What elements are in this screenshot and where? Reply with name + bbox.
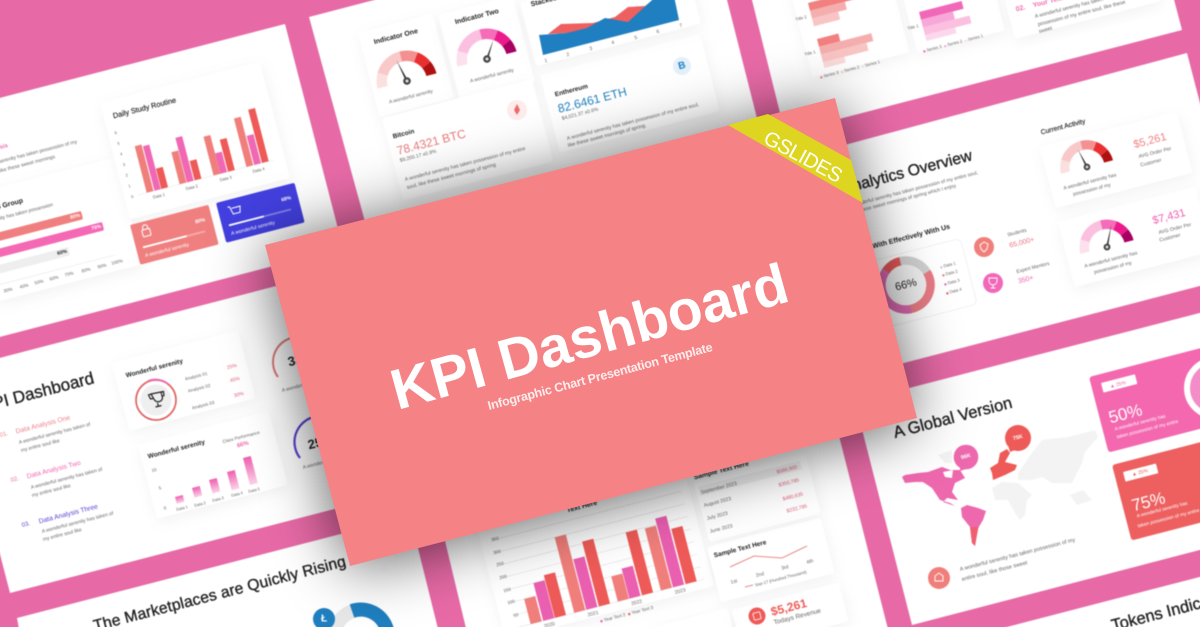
ethereum text: Enthereum bbox=[554, 83, 589, 98]
table: August 2023 bbox=[703, 496, 732, 509]
table: Sample Text Here bbox=[693, 460, 750, 481]
y axis labels: 100 bbox=[507, 599, 516, 605]
item 01 bbox=[0, 415, 92, 454]
card: list bbox=[1005, 0, 1160, 39]
stat: expert mentors: Expert Mentors bbox=[1016, 261, 1051, 275]
line chart: 1st bbox=[730, 578, 739, 586]
bitcoin text: 78.4321 BTC bbox=[395, 126, 468, 158]
item 02 bbox=[10, 460, 104, 499]
card: activity one bbox=[1040, 112, 1192, 208]
gradient bar chart: Data 4 bbox=[231, 490, 244, 498]
ethereum text: like these sweet mornings of spring. bbox=[567, 123, 647, 149]
bar chart: daily study: 4 bbox=[119, 151, 124, 157]
icon: litecoin bbox=[313, 608, 335, 627]
icon: bitcoin: B bbox=[677, 60, 687, 72]
list item 02: sweet bbox=[1038, 26, 1053, 35]
slide: analytics overview bbox=[800, 53, 1200, 377]
progress group: 80% bbox=[81, 266, 91, 274]
grouped bar chart bbox=[492, 491, 706, 627]
coral KPI card bbox=[130, 205, 219, 265]
slide: KPI dashboard list bbox=[0, 272, 400, 593]
progress group: 50% bbox=[34, 278, 44, 286]
table: July 2023 bbox=[706, 511, 729, 522]
panel: 75% card: A wonderful serenity has bbox=[1136, 500, 1189, 519]
area chart: 6 bbox=[656, 29, 660, 35]
panel: 75% card: 75% bbox=[1130, 488, 1167, 515]
map caption: A wonderful serenity has taken possession of my bbox=[959, 537, 1076, 573]
slide: global version bbox=[855, 309, 1200, 625]
progress group: 40% bbox=[19, 282, 29, 290]
icon: bag bbox=[141, 224, 151, 237]
list item 02: 02. bbox=[1015, 4, 1026, 13]
heading: Wonderful serenity bbox=[125, 358, 184, 379]
y axis labels: 50 bbox=[513, 612, 520, 618]
y axis labels bbox=[491, 536, 520, 618]
analysis rows: Analysis 03 bbox=[191, 400, 215, 410]
slide: marketplaces bbox=[17, 516, 442, 627]
description: like these sweet mornings of spring which I enjoy bbox=[850, 183, 957, 216]
table: $232,785 bbox=[786, 503, 808, 515]
ethereum text: A wonderful serenity has taken possession of my entire soul, bbox=[566, 102, 700, 142]
bitcoin text: A wonderful serenity has taken possession of my entire bbox=[404, 146, 526, 183]
line chart: 2nd bbox=[755, 571, 765, 579]
line chart bbox=[713, 539, 814, 587]
ring: 25%: 25% bbox=[306, 431, 335, 452]
icon: bitcoin bbox=[673, 57, 691, 75]
table: June 2023 bbox=[709, 523, 734, 535]
analysis rows: Analysis 02 bbox=[187, 383, 211, 393]
card: indicator one bbox=[358, 14, 454, 117]
ring: 25%: A wonderful serenity bbox=[302, 454, 348, 471]
card: activity two bbox=[1058, 186, 1200, 287]
caption: possession of my bbox=[1094, 260, 1133, 276]
value: $7,431: AVG Order Per bbox=[1158, 222, 1192, 236]
stat: students: Students bbox=[1007, 228, 1028, 238]
line chart: Sep-17 (Hundred Thousand) bbox=[754, 569, 808, 587]
item 02: Data Analysis Two bbox=[26, 460, 82, 480]
ethereum text: 82.6461 ETH bbox=[556, 85, 628, 116]
bitcoin text bbox=[392, 126, 526, 191]
gradient bar chart: Data 5 bbox=[248, 486, 261, 494]
bar chart: daily study: Data 2 bbox=[185, 183, 199, 191]
panel: 50% card: ▲ 25% bbox=[1109, 380, 1127, 390]
card: indicator two bbox=[438, 0, 535, 102]
value: $5,261: $5,261 bbox=[1132, 131, 1168, 151]
slide: indicators bbox=[309, 0, 760, 240]
heading: current activity: Current Activity bbox=[1040, 118, 1087, 136]
gradient bar chart: Data 1 bbox=[176, 504, 189, 512]
table: $350,785 bbox=[778, 477, 800, 489]
chart title: Text Here bbox=[566, 500, 598, 514]
stat: students bbox=[974, 228, 1035, 257]
y axis labels: 300 bbox=[493, 549, 502, 555]
card: secondary bbox=[650, 608, 737, 627]
gradient bar chart bbox=[151, 456, 261, 512]
card: wonderful serenity ring bbox=[112, 330, 255, 431]
bar chart: daily study: 2 bbox=[125, 172, 129, 178]
caption: A wonderful serenity has bbox=[1084, 250, 1139, 270]
progress group: 90% bbox=[97, 262, 107, 270]
card: revenue bbox=[732, 582, 849, 627]
item 03: my entire soul like bbox=[42, 527, 83, 543]
area chart: 7 bbox=[679, 23, 683, 29]
card: pink horizontal bars bbox=[900, 0, 1005, 53]
progress group: 70% bbox=[64, 270, 74, 278]
table: $586,900 bbox=[776, 464, 798, 476]
card: stacked area bbox=[520, 0, 701, 66]
item 01: Data Analysis One bbox=[15, 415, 71, 435]
card: left text bbox=[0, 157, 143, 301]
gauge: activity one bbox=[1054, 134, 1114, 177]
card: daily study chart bbox=[100, 62, 290, 219]
slide: bottom charts bbox=[440, 420, 892, 627]
analysis rows: Analysis 01 bbox=[184, 371, 208, 381]
area chart bbox=[530, 0, 683, 64]
card: ethereum bbox=[540, 34, 720, 152]
caption: A wonderful serenity has bbox=[1063, 172, 1118, 192]
donut panel bbox=[849, 238, 977, 333]
y axis labels: 250 bbox=[496, 561, 505, 567]
icon: cart bbox=[227, 204, 242, 218]
panel: 50% card bbox=[1089, 327, 1200, 453]
gauge: indicator one bbox=[370, 44, 437, 92]
bitcoin text: Bitcoin bbox=[392, 128, 415, 140]
legend: ■ Series 3 ■ Series 2 ■ Series 1 bbox=[819, 59, 881, 79]
chart: coral bars: Title 1 bbox=[804, 49, 817, 57]
blue KPI card bbox=[216, 183, 305, 243]
description: A wonderful serenity has taken possession of my entire soul, bbox=[848, 170, 979, 209]
list item 02: possession of my entire soul, like these bbox=[1037, 0, 1126, 28]
gradient bar chart: 5 bbox=[158, 485, 162, 491]
legend: ■ Series 3 ■ Series 2 ■ Series 1 bbox=[922, 33, 984, 53]
heading: Indicator One: Indicator One bbox=[373, 28, 419, 46]
grouped bar chart: 2023 bbox=[674, 587, 687, 596]
donut panel: ■ Data 2 bbox=[941, 268, 959, 277]
slide: bar charts bbox=[749, 0, 1182, 133]
ring with trophy icon bbox=[136, 380, 176, 420]
gauge: indicator two bbox=[450, 22, 517, 70]
donut panel: ■ Data 3 bbox=[943, 277, 961, 286]
icon: ethereum bbox=[507, 100, 527, 120]
ring: 33%: 33% bbox=[286, 348, 315, 369]
stat: expert mentors: 350+ bbox=[1017, 275, 1035, 285]
card: bitcoin bbox=[382, 79, 553, 200]
bar chart: daily study: Data 1 bbox=[152, 192, 166, 200]
analysis rows bbox=[184, 363, 245, 410]
chart: coral bars bbox=[795, 0, 881, 79]
bar chart: daily study: 6 bbox=[114, 130, 118, 135]
card: line chart bbox=[707, 518, 835, 602]
gauge: activity two bbox=[1074, 214, 1134, 257]
bubble: 75K: 75K bbox=[1012, 434, 1024, 442]
area chart: 3 bbox=[589, 46, 593, 52]
GSLIDES ribbon bbox=[728, 114, 863, 203]
chart: pink bars bbox=[907, 0, 984, 53]
revenue stat: Todays Revenue bbox=[773, 607, 822, 626]
bitcoin text: $9,200.17 x0.9% bbox=[399, 149, 438, 164]
item 01: my entire soul like bbox=[20, 438, 61, 454]
bar chart: daily study: 0 bbox=[130, 194, 135, 199]
ethereum text bbox=[554, 83, 700, 149]
slide: tokens bbox=[945, 573, 1200, 627]
GSLIDES ribbon: GSLIDES bbox=[760, 126, 846, 188]
subtitle: Infographic Chart Presentation Template bbox=[486, 340, 714, 413]
bubble: 96K bbox=[954, 445, 978, 471]
panel: 75% card bbox=[1112, 415, 1200, 541]
map caption: entire soul, like those sweet bbox=[961, 560, 1029, 583]
line chart: 3rd bbox=[781, 564, 789, 572]
y axis labels: 150 bbox=[503, 587, 512, 593]
analysis rows: 25% bbox=[226, 363, 238, 371]
value: $7,431: Customer bbox=[1159, 232, 1182, 244]
heading: work with us: Work With Effectively With Us bbox=[853, 224, 951, 255]
y axis labels: 350 bbox=[491, 536, 500, 542]
panel: 50% card: 50% bbox=[1107, 400, 1144, 427]
panel: 75% card: taken possession of my entire bbox=[1137, 508, 1200, 529]
legend: ■ Year Text 2 ■ Year Text 3 bbox=[599, 605, 654, 623]
heading: Wonderful serenity bbox=[147, 439, 206, 460]
coral KPI card: 80% bbox=[195, 217, 206, 225]
bar chart: daily study: Data 3 bbox=[219, 174, 233, 182]
progress group: 75% bbox=[91, 224, 102, 232]
donut: tokens bbox=[334, 610, 388, 627]
item 03 bbox=[21, 503, 115, 543]
bubble: 96K: 96K bbox=[960, 453, 972, 461]
card: coral horizontal bars bbox=[790, 0, 909, 77]
blue KPI card: 68% bbox=[281, 195, 292, 203]
title: KPI Dashboard bbox=[384, 252, 795, 423]
y axis labels: 200 bbox=[499, 574, 508, 580]
gradient bar chart: Data 2 bbox=[194, 500, 207, 508]
bar chart: daily study: 1 bbox=[128, 183, 132, 189]
caption: possession of my bbox=[1073, 182, 1112, 198]
chart: coral bars: Title 2 bbox=[795, 14, 808, 22]
world map bbox=[902, 430, 1098, 546]
grouped bar chart: 2021 bbox=[587, 610, 599, 618]
donut panel: 66% bbox=[894, 276, 918, 294]
item 03: 03. bbox=[21, 521, 31, 529]
item 03: Data Analysis Three bbox=[38, 503, 99, 525]
area chart: 2 bbox=[566, 52, 570, 58]
table bbox=[693, 460, 808, 535]
progress group bbox=[0, 198, 123, 294]
item 02: my entire soul like bbox=[31, 483, 72, 499]
area chart: 4 bbox=[611, 40, 615, 46]
item 01: A wonderful serenity has taken of bbox=[18, 422, 92, 446]
donut panel: ■ Data 4 bbox=[945, 286, 963, 295]
gradient bar chart: 10 bbox=[151, 467, 158, 473]
progress group: 30% bbox=[3, 286, 13, 294]
panel: 50% card: taken possession of my entire bbox=[1116, 419, 1179, 440]
card: wonderful serenity bars bbox=[138, 411, 288, 519]
ethereum text: $4,021.37 x0.6% bbox=[561, 107, 600, 122]
class performance: Class Performance bbox=[222, 430, 261, 444]
revenue stat bbox=[748, 596, 822, 626]
bitcoin text: soul, like these sweet mornings of spring bbox=[406, 162, 497, 191]
progress group: 60% bbox=[57, 249, 68, 257]
coral KPI card: A wonderful serenity bbox=[145, 242, 190, 259]
revenue stat: $5,261 bbox=[769, 596, 809, 619]
item 03: A wonderful serenity has taken of bbox=[41, 511, 115, 535]
panel: 75% card: ▲ 25% bbox=[1131, 468, 1149, 478]
ring: 33% bbox=[273, 337, 327, 394]
class performance: 66% bbox=[236, 440, 250, 449]
item 02: A wonderful serenity has taken of bbox=[30, 467, 104, 491]
gradient bar chart: Data 3 bbox=[212, 495, 225, 503]
value: $7,431: $7,431 bbox=[1151, 207, 1187, 227]
stat: expert mentors bbox=[983, 261, 1051, 293]
progress group: 100% bbox=[111, 258, 123, 266]
item 02: 02. bbox=[10, 476, 20, 484]
heading: A Global Version bbox=[891, 394, 1014, 442]
card: table bbox=[694, 453, 821, 542]
caption: A wonderful serenity bbox=[388, 88, 434, 106]
ring: 25% bbox=[294, 416, 348, 471]
analysis rows: 45% bbox=[229, 376, 241, 384]
value: $7,431 bbox=[1151, 207, 1192, 244]
value: $5,261: AVG Order Per bbox=[1138, 146, 1172, 160]
bar chart: daily study: 5 bbox=[117, 140, 121, 146]
line chart: 4th bbox=[806, 558, 814, 566]
blue KPI card: A wonderful serenity bbox=[231, 220, 276, 237]
value: $5,261 bbox=[1132, 131, 1172, 169]
bubble: 75K bbox=[1005, 425, 1031, 452]
list item 02 bbox=[1015, 0, 1126, 35]
area chart: 1 bbox=[544, 58, 548, 64]
icon: badge bbox=[928, 567, 950, 589]
area chart: 5 bbox=[634, 35, 638, 41]
ring: 33%: A wonderful serenity bbox=[281, 377, 327, 394]
progress group: 80% bbox=[70, 213, 81, 221]
table: $480,635 bbox=[782, 491, 804, 503]
stat: students: 65,000+ bbox=[1009, 236, 1035, 250]
gradient bar chart: 0 bbox=[163, 505, 167, 511]
value: $5,261: Customer bbox=[1140, 157, 1163, 169]
grouped bar chart: 2022 bbox=[631, 599, 643, 607]
bar chart: daily study: Data 4 bbox=[252, 166, 266, 174]
caption: A wonderful serenity bbox=[469, 67, 515, 85]
slide: study routine bbox=[0, 24, 343, 342]
panel: 50% card: A wonderful serenity has bbox=[1114, 413, 1167, 432]
progress group: 60% bbox=[49, 274, 59, 282]
icon: litecoin: Ł bbox=[321, 614, 327, 624]
bar chart: daily study bbox=[114, 94, 276, 205]
line chart: Sample Text Here bbox=[713, 539, 768, 559]
heading: Analytics Overview bbox=[841, 147, 975, 197]
card: main bar chart bbox=[472, 455, 714, 627]
title: Daily Study Routine: Daily Study Routine bbox=[112, 95, 177, 120]
analysis rows: 30% bbox=[233, 391, 245, 399]
table: September 2023 bbox=[700, 481, 738, 496]
chart: pink bars: Title 1 bbox=[907, 23, 920, 31]
heading: Indicator Two: Indicator Two bbox=[454, 8, 500, 26]
donut panel: ■ Data 1 bbox=[939, 260, 957, 269]
bar chart: daily study: 3 bbox=[122, 162, 126, 167]
